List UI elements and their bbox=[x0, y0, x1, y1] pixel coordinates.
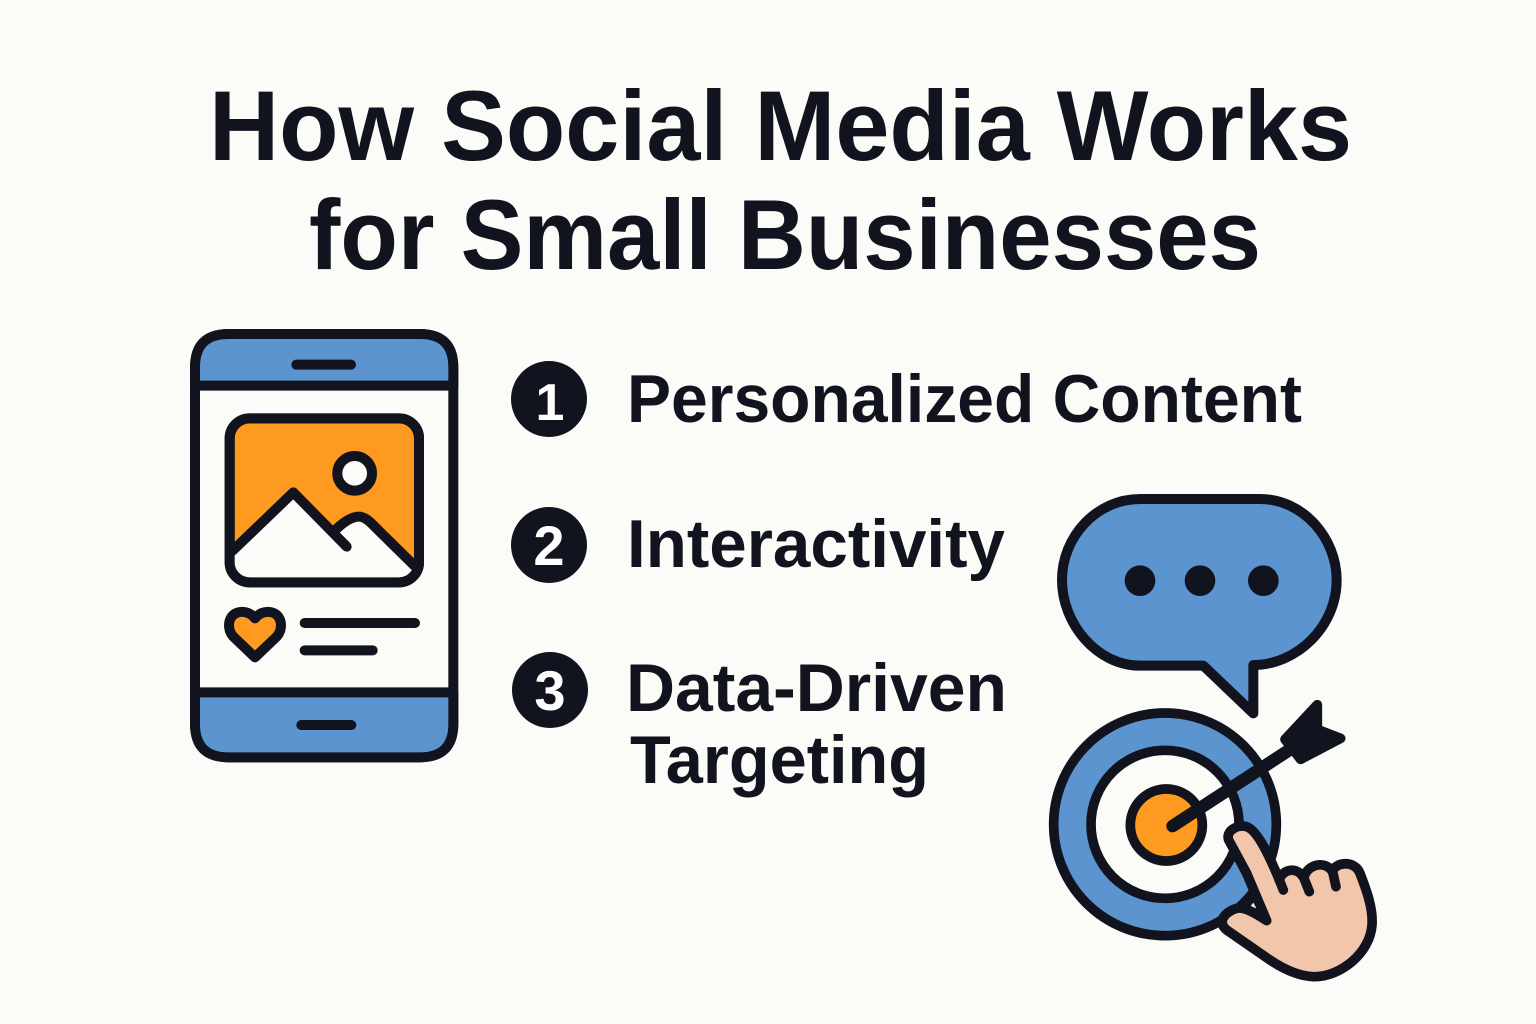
item 2: interactivity: 2 bbox=[533, 514, 565, 577]
title: for Small Businesses bbox=[309, 179, 1261, 290]
item 2: interactivity: Interactivity bbox=[627, 506, 1005, 582]
hand bbox=[1222, 826, 1372, 977]
arrow bbox=[1173, 705, 1341, 826]
item 3: data-driven targeting: 3 bbox=[534, 659, 566, 722]
icon: smartphone with social post bbox=[195, 334, 453, 757]
item 1: personalized content: Personalized Content bbox=[627, 361, 1302, 437]
icon: target with arrow and pointing hand bbox=[1054, 705, 1372, 977]
item 3: data-driven targeting: Targeting bbox=[630, 722, 929, 798]
image placeholder bbox=[230, 418, 419, 582]
icon: heart bbox=[229, 612, 281, 657]
caption lines bbox=[305, 623, 415, 650]
title: How Social Media Works bbox=[209, 70, 1352, 181]
item 1: personalized content: 1 bbox=[536, 374, 564, 432]
icon: speech bubble bbox=[1062, 499, 1337, 713]
item 3: data-driven targeting bbox=[512, 650, 1007, 798]
title bbox=[209, 70, 1352, 290]
target rings bbox=[1054, 713, 1276, 936]
item 3: data-driven targeting: Data-Driven bbox=[626, 650, 1007, 726]
